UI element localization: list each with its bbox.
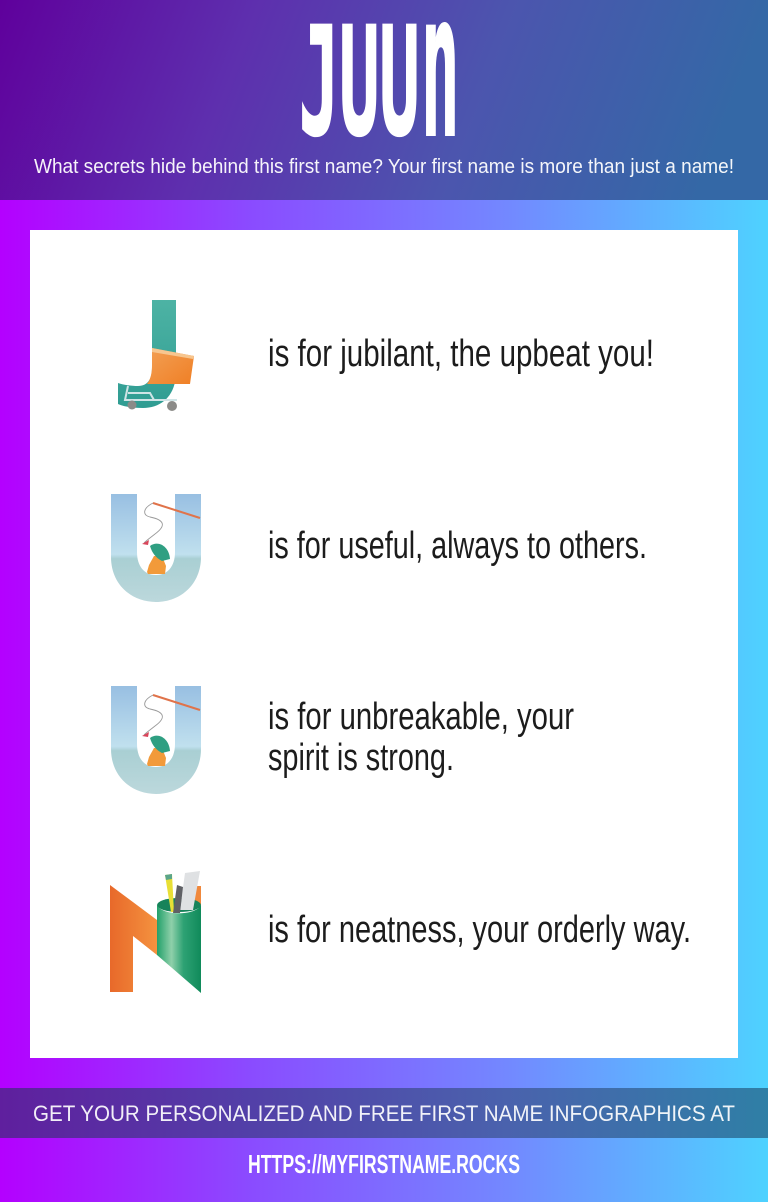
text: second U line: spirit is strong.	[268, 737, 454, 779]
icon: letter N with pencil cup	[110, 871, 201, 993]
footer band	[0, 1088, 768, 1138]
title: JUU	[299, 0, 420, 170]
text: second U line: is for unbreakable, your	[268, 696, 574, 738]
white content panel	[30, 230, 738, 1058]
icon: letter U with fishing rod	[111, 494, 201, 602]
subtitle: What secrets hide behind this first name? Your first name is more than just a name!	[34, 156, 734, 178]
text: U line: is for useful, always to others.	[268, 525, 647, 567]
title	[299, 0, 460, 183]
footer text: GET YOUR PERSONALIZED AND FREE FIRST NAME INFOGRAPHICS AT	[33, 1101, 735, 1126]
icon: letter J with shopping cart	[118, 300, 194, 411]
header banner	[0, 0, 768, 200]
text: J line: is for jubilant, the upbeat you!	[268, 333, 654, 375]
icon: second letter U with fishing rod	[111, 686, 201, 794]
footer URL: HTTPS://MYFIRSTNAME.ROCKS	[248, 1149, 520, 1179]
text: second U line	[268, 696, 574, 779]
